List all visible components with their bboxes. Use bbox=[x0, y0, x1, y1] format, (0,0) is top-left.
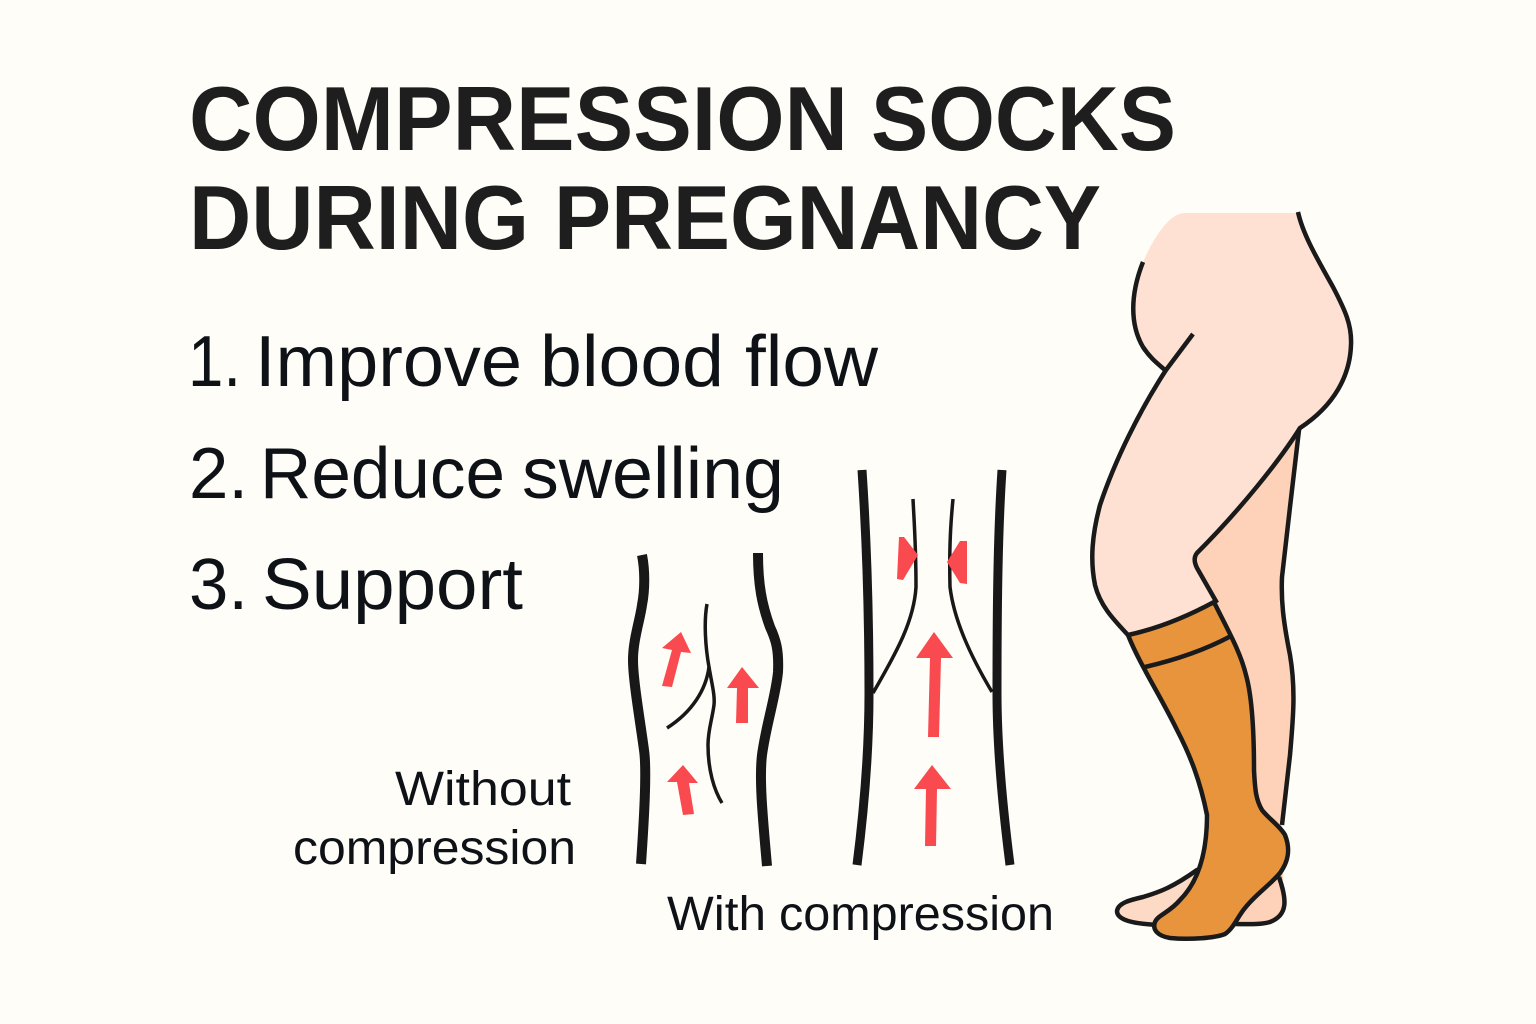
label: without compression bbox=[293, 763, 576, 875]
label: with compression: compression bbox=[779, 888, 1054, 941]
benefits list: swelling bbox=[522, 434, 784, 514]
red arrows: without compression bbox=[662, 632, 759, 815]
compression sock bbox=[1128, 602, 1288, 939]
benefits list: blood bbox=[540, 322, 724, 402]
vein outer walls bbox=[633, 553, 778, 866]
back leg outline bbox=[1282, 430, 1299, 825]
diagram: vein with compression bbox=[857, 470, 1010, 865]
benefits list: 2. bbox=[189, 434, 248, 514]
body and front leg bbox=[1092, 213, 1351, 635]
front foot behind sock bbox=[1117, 870, 1200, 925]
body outlines bbox=[1092, 212, 1351, 635]
heel behind sock bbox=[1235, 877, 1284, 924]
title: SOCKS bbox=[871, 69, 1176, 170]
illustration: pregnant leg in compression sock bbox=[1092, 212, 1351, 939]
sock cuff line bbox=[1145, 636, 1231, 667]
back leg bbox=[1197, 430, 1299, 880]
title: DURING bbox=[189, 168, 529, 269]
diagram: vein without compression bbox=[633, 553, 778, 866]
inner lines bbox=[873, 499, 992, 693]
outer walls bbox=[857, 470, 1010, 865]
title: PREGNANCY bbox=[554, 168, 1101, 269]
inner valve lines bbox=[667, 604, 722, 803]
red arrows: with compression bbox=[897, 537, 967, 846]
title bbox=[189, 69, 1176, 269]
label: without compression: Without bbox=[395, 763, 571, 816]
benefits list: Reduce bbox=[260, 434, 505, 514]
title: COMPRESSION bbox=[189, 69, 848, 170]
benefits list: 1. bbox=[188, 322, 241, 402]
heel outline bbox=[1235, 877, 1284, 924]
benefits list: Improve bbox=[255, 322, 522, 402]
benefits list bbox=[188, 322, 879, 625]
label: without compression: compression bbox=[293, 822, 576, 875]
benefits list: Support bbox=[262, 545, 523, 625]
benefits list: 3. bbox=[189, 545, 248, 625]
label: with compression: With bbox=[667, 888, 766, 941]
benefits list: flow bbox=[745, 322, 879, 402]
